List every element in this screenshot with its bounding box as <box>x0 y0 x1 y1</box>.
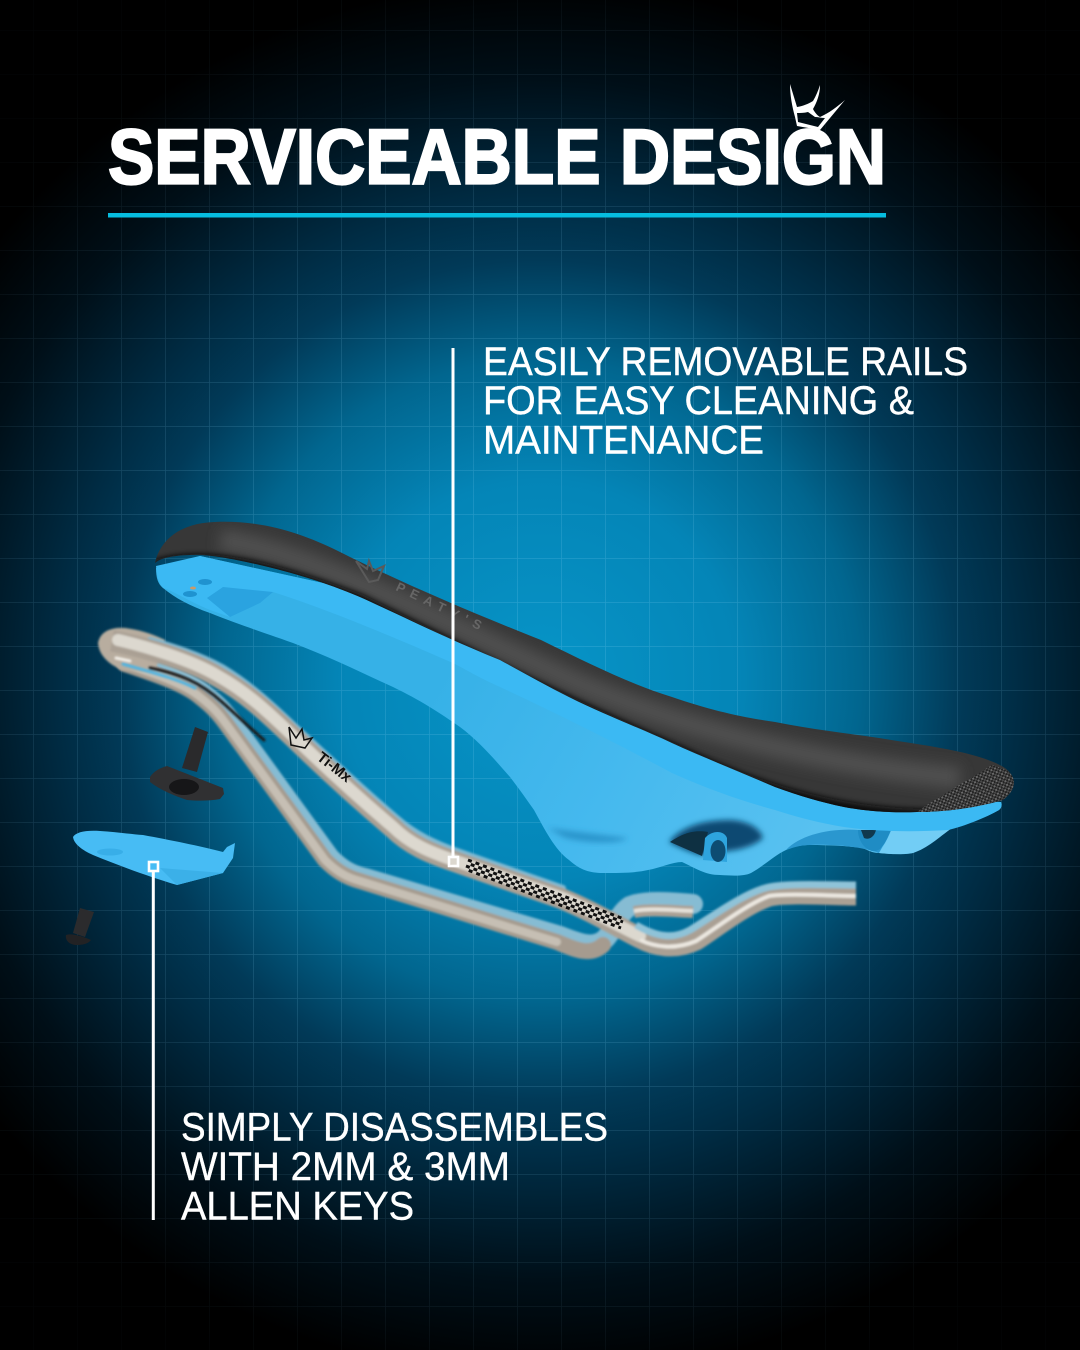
bolt with plate <box>150 727 224 801</box>
saddle carbon nose <box>917 765 1014 812</box>
rail model text: Ti-Mx <box>314 749 355 787</box>
rail nose <box>98 628 165 672</box>
rear rail <box>125 662 693 951</box>
saddle soft shadow <box>548 828 628 842</box>
icon: crown logo <box>790 84 845 130</box>
saddle black cover <box>155 522 1014 812</box>
blue cap <box>73 831 235 885</box>
callout line <box>152 871 155 1220</box>
callout text: MAINTENANCE <box>483 418 764 462</box>
callout marker <box>149 862 158 871</box>
small bolt <box>66 908 94 945</box>
saddle blue lip <box>156 556 1002 831</box>
main rail <box>112 640 856 947</box>
callout text: SIMPLY DISASSEMBLES <box>181 1106 608 1150</box>
callout text: FOR EASY CLEANING & <box>483 379 914 423</box>
rail checkered pattern <box>465 860 624 928</box>
saddle underside body <box>156 556 1002 876</box>
callout: allen keys <box>149 862 619 1228</box>
saddle <box>140 510 1030 876</box>
callout line <box>452 348 454 856</box>
rails <box>98 628 856 951</box>
saddle clamp hole <box>669 820 763 862</box>
saddle rear clamp shadow <box>786 828 952 854</box>
callout marker <box>449 857 458 866</box>
callout: removable rails <box>449 340 979 866</box>
title: SERVICEABLE DESIGN <box>108 112 886 200</box>
saddle recess <box>183 579 273 617</box>
saddle brand text: PEATY'S <box>394 579 490 636</box>
rail crown icon <box>289 727 312 748</box>
title underline <box>108 213 886 218</box>
callout text: WITH 2MM & 3MM <box>181 1145 510 1189</box>
saddle crown emboss <box>356 561 384 582</box>
callout text: EASILY REMOVABLE RAILS <box>483 340 968 384</box>
callout text: ALLEN KEYS <box>181 1184 414 1228</box>
